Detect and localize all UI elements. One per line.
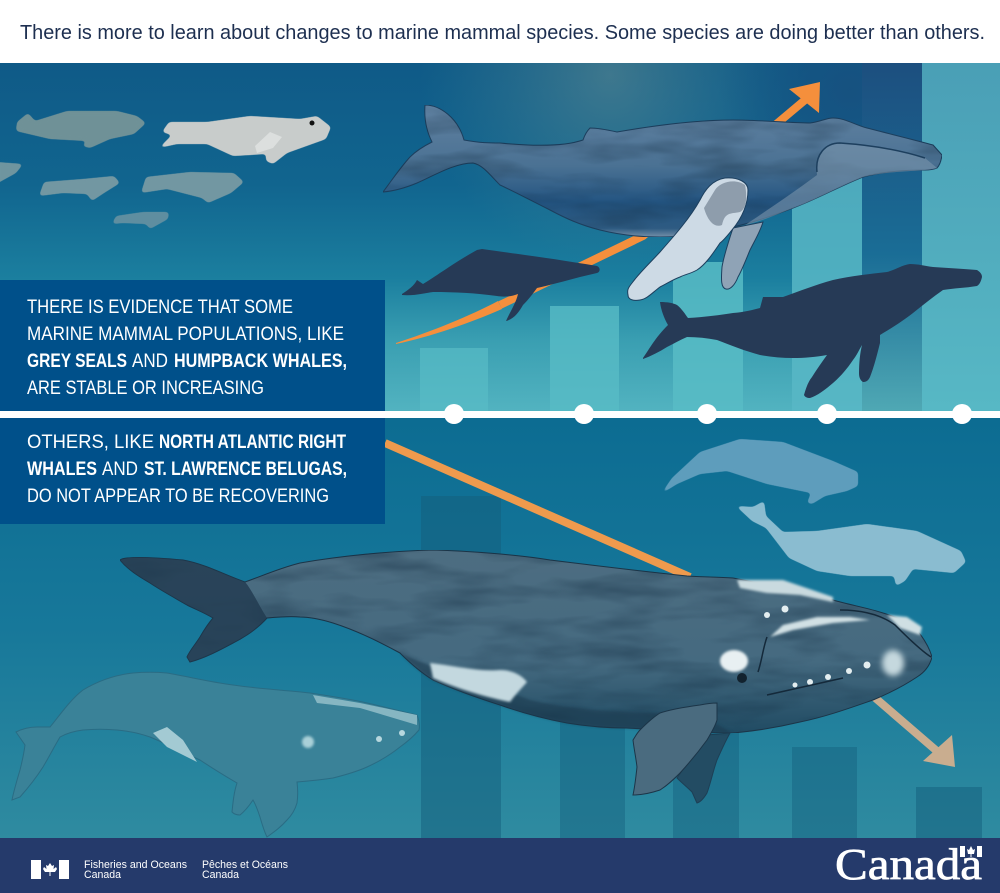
rear flipper — [677, 733, 730, 803]
seal: light grey — [159, 116, 331, 164]
panel: lower ocean with falling bars — [0, 418, 1000, 839]
text box: stable or increasing — [0, 280, 385, 411]
eye — [737, 673, 747, 683]
flukes and body — [383, 105, 942, 237]
wordmark flag — [960, 846, 982, 857]
arrow: falling trend — [385, 443, 955, 767]
Canada wordmark: Canada — [835, 840, 982, 889]
seal silhouette 4 — [112, 212, 169, 229]
text box: not recovering: DO NOT APPEAR TO BE RECOVERING — [27, 486, 329, 507]
falling bar 4 — [792, 747, 857, 839]
rear flipper — [721, 222, 763, 289]
text box: not recovering: OTHERS, LIKE — [27, 432, 154, 453]
text box: stable or increasing: THERE IS EVIDENCE THAT SOME — [27, 297, 293, 318]
text box: not recovering: AND — [102, 459, 138, 480]
text box: stable or increasing: MARINE MAMMAL POPULATIONS, LIKE — [27, 324, 344, 345]
footer band: Canada — [84, 869, 122, 881]
panel: upper ocean with rising bars — [0, 63, 1000, 411]
callosity: snout — [887, 615, 922, 635]
callosity: crown — [737, 580, 833, 602]
seal flipper — [255, 132, 282, 153]
seal: faded grey — [16, 111, 146, 148]
text box: not recovering — [0, 418, 385, 524]
text box: stable or increasing: HUMPBACK WHALES, — [174, 351, 347, 372]
belly patch — [153, 727, 197, 762]
white patch behind eye — [720, 650, 748, 672]
right whale: large — [120, 550, 932, 803]
belly patch — [430, 663, 527, 702]
main flipper — [628, 178, 748, 300]
department name, English: Fisheries and Oceans — [84, 859, 187, 871]
mouth line — [758, 610, 931, 695]
jaw line — [817, 143, 925, 172]
humpback whale: main — [383, 105, 942, 300]
rising bar 1 — [420, 348, 488, 411]
department name, French: Pêches et Océans — [202, 859, 288, 871]
seal silhouette 3 — [141, 172, 244, 203]
footer band — [0, 838, 1000, 893]
head spot — [376, 736, 382, 742]
seal silhouette 2 — [39, 176, 120, 201]
eye spot — [302, 736, 314, 748]
beluga: upper — [661, 439, 858, 504]
footer band: Canada — [202, 869, 240, 881]
timeline axis with dots — [0, 404, 998, 424]
text box: stable or increasing: ARE STABLE OR INCREASING — [27, 378, 264, 399]
falling bar 2 — [560, 700, 625, 839]
falling bar 5 — [916, 787, 982, 839]
body and flukes — [120, 550, 932, 733]
white patch on jaw — [882, 650, 904, 676]
flipper shading — [704, 181, 746, 226]
falling bar 1 — [421, 496, 501, 839]
humpback silhouette: large — [643, 264, 982, 398]
jaw spots — [764, 606, 870, 688]
head spots — [399, 730, 405, 736]
text box: stable or increasing: AND — [132, 351, 168, 372]
seal eye — [310, 120, 314, 126]
falling bar 3 — [673, 730, 739, 839]
belly shading — [400, 653, 733, 733]
arrow: rising trend — [396, 82, 820, 344]
beluga: lower — [736, 501, 966, 586]
rising bar 3 — [673, 262, 743, 411]
right whale: small, bottom left — [12, 672, 419, 837]
callosity strip — [313, 695, 417, 725]
heading: There is more to learn about changes to marine mammal species. Some species are doing better than others. — [20, 22, 985, 44]
humpback silhouette: small — [402, 249, 600, 321]
front flipper — [633, 703, 717, 795]
text box: not recovering: ST. LAWRENCE BELUGAS, — [144, 459, 347, 480]
seal silhouette 1 — [0, 162, 23, 184]
tail shading — [120, 557, 267, 662]
seals group — [0, 111, 331, 229]
rising bar 2 — [550, 306, 619, 411]
icon: Canadian flag — [31, 860, 69, 879]
rising bar 5 — [922, 63, 1000, 411]
text box: not recovering: WHALES — [27, 459, 97, 480]
text box: not recovering: NORTH ATLANTIC RIGHT — [159, 432, 346, 453]
rising bar 4 — [792, 165, 862, 411]
text box: stable or increasing: GREY SEALS — [27, 351, 127, 372]
callosity: lip line — [770, 617, 870, 637]
throat pleats — [745, 143, 937, 225]
